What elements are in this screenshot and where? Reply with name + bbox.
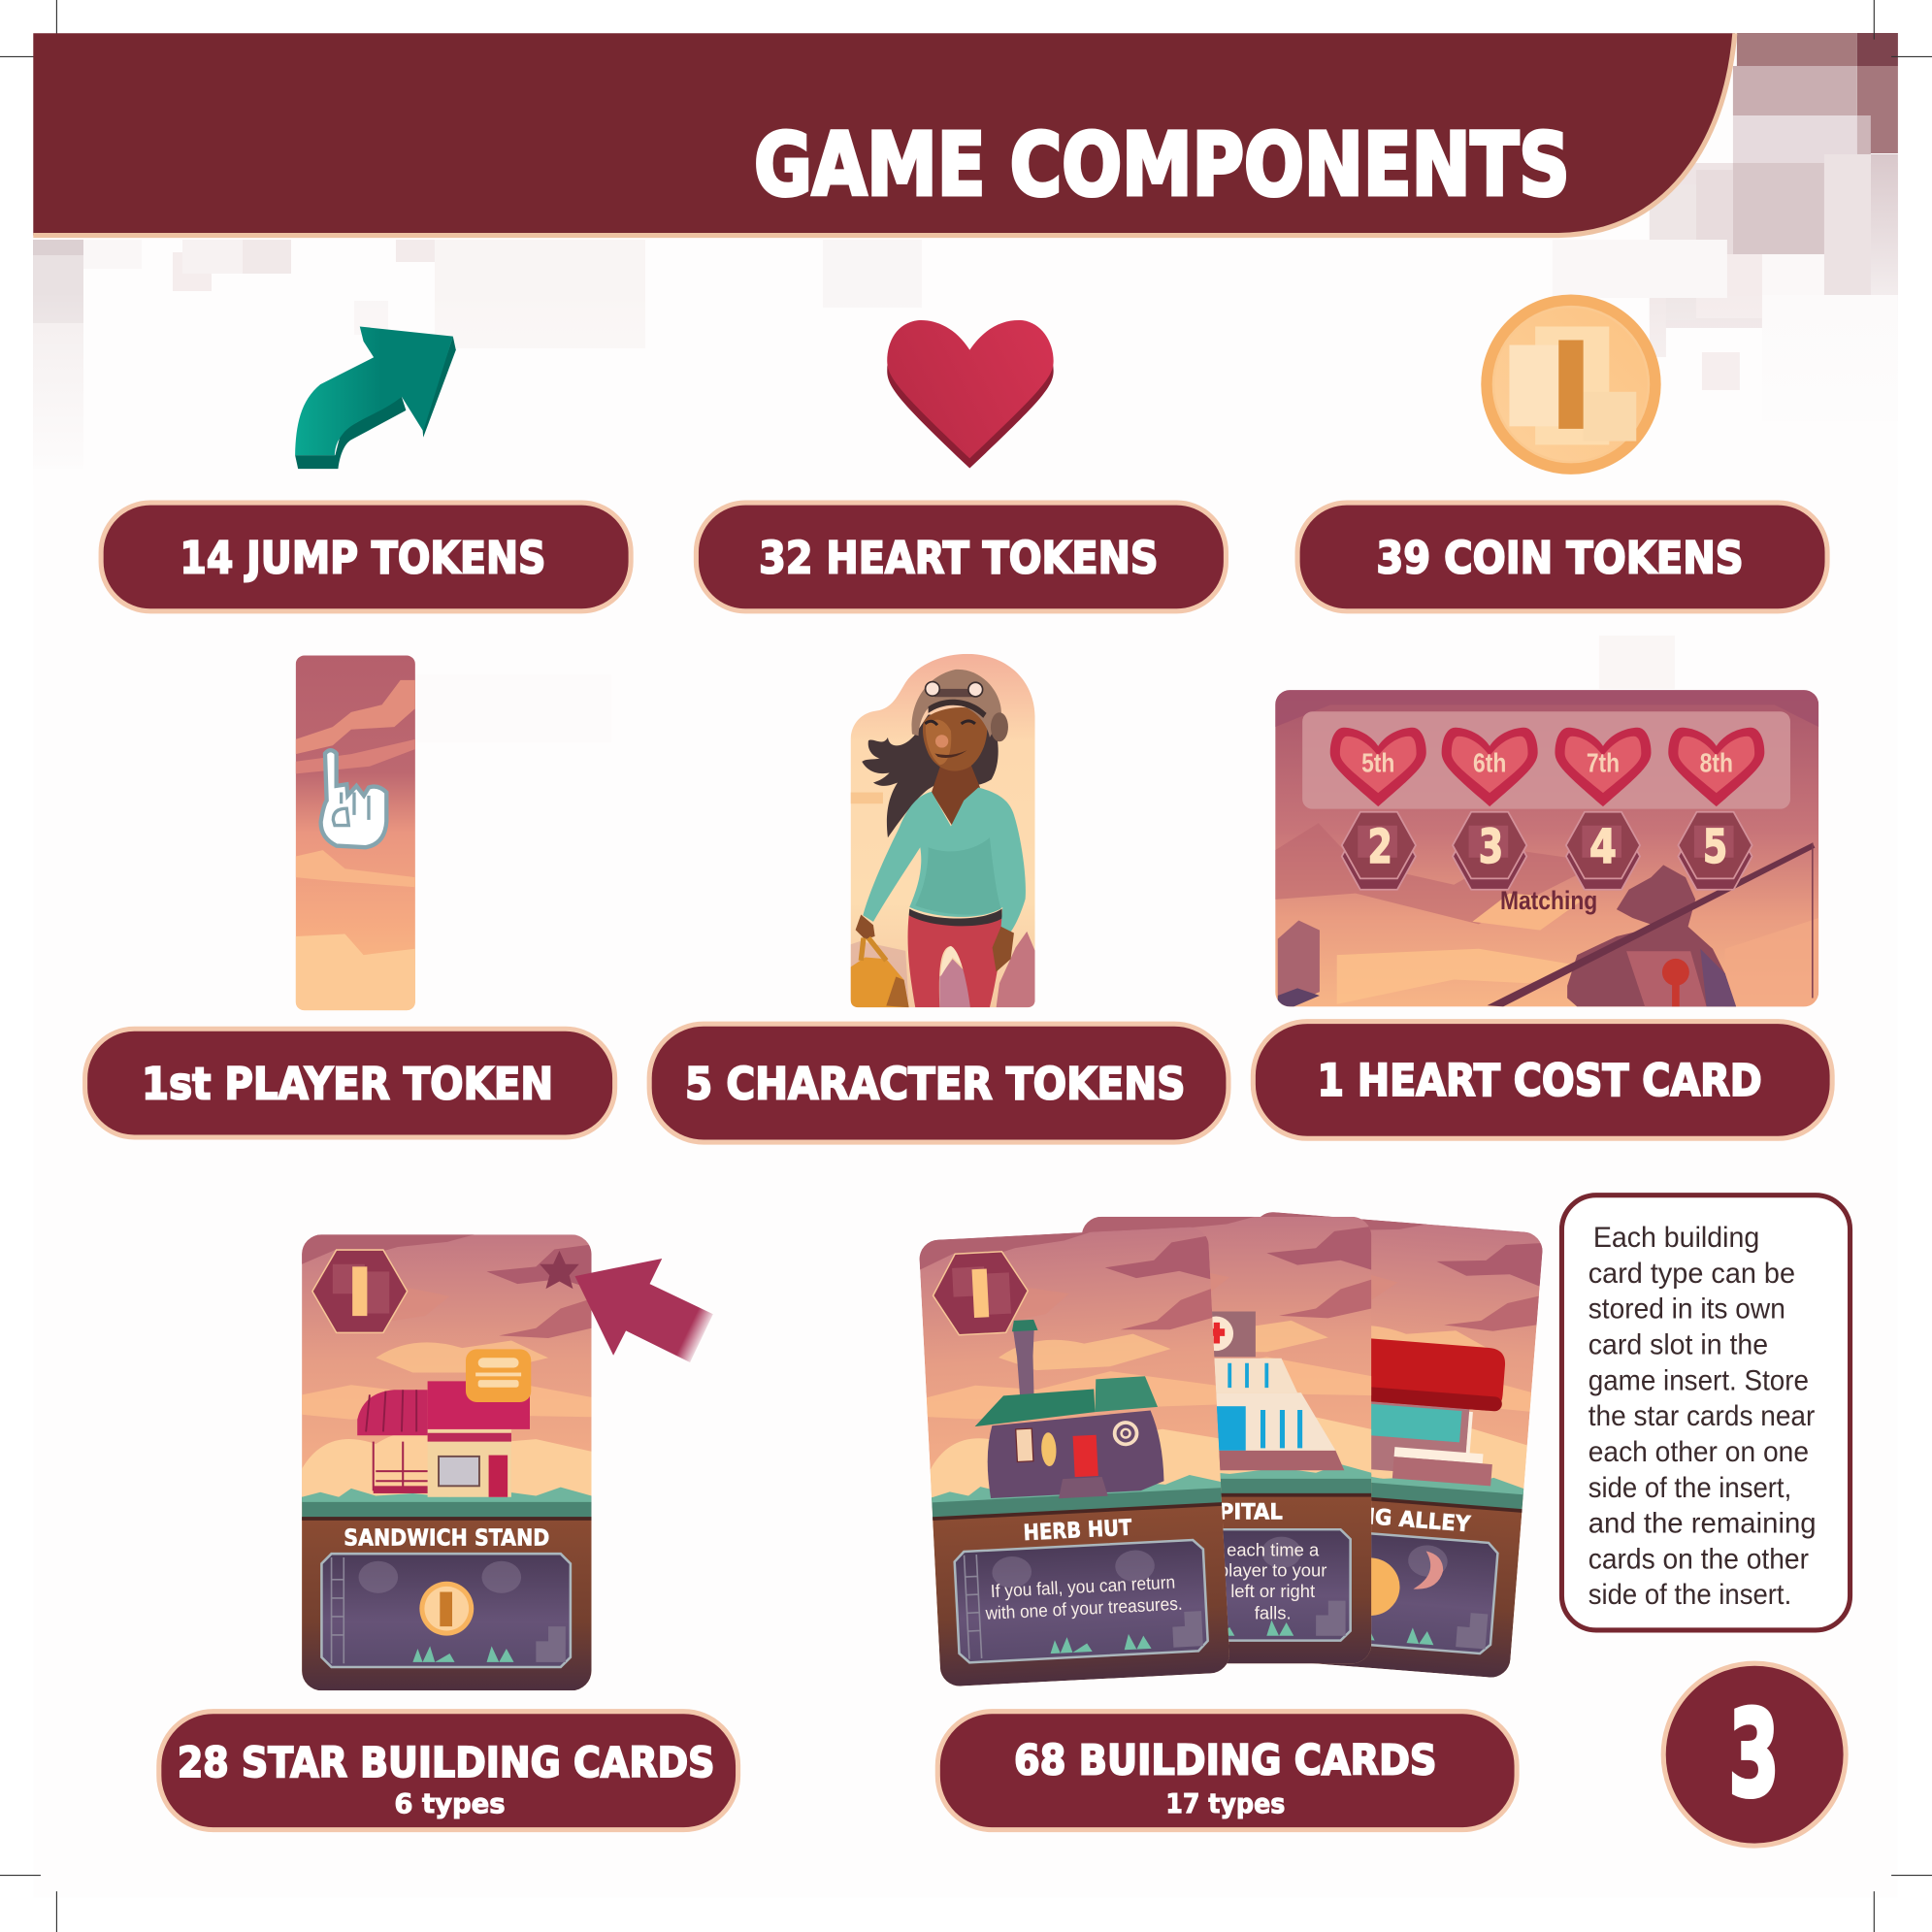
card: herb hut — [919, 1227, 1230, 1686]
hex: cost 2: 2 — [1367, 820, 1392, 874]
label: 1 heart cost card: 1 HEART COST CARD — [1317, 1055, 1762, 1106]
icon: jump arrow — [295, 326, 456, 469]
coin — [1338, 1555, 1402, 1618]
callout: storage note: Each building — [1593, 1223, 1759, 1254]
ability text: left or right — [1230, 1582, 1315, 1601]
ability text: player to your — [1219, 1561, 1326, 1581]
callout: storage note: and the remaining — [1588, 1509, 1817, 1540]
ability text: with one of your treasures. — [984, 1593, 1183, 1623]
label: 39 coin tokens: 39 COIN TOKENS — [1376, 532, 1744, 583]
building: hospital — [1198, 1311, 1344, 1470]
heart: 8th: 8th — [1700, 748, 1733, 778]
hands — [856, 915, 875, 939]
hex: cost 4: 4 — [1589, 820, 1617, 874]
title: GAME COMPONENTS — [754, 115, 1570, 215]
obelisk — [1278, 921, 1320, 1000]
hair — [862, 715, 999, 837]
hex: cost 4 — [1566, 812, 1640, 890]
label: 32 heart tokens: 32 HEART TOKENS — [759, 532, 1159, 583]
callout: storage note: each other on one — [1588, 1437, 1809, 1468]
star marker — [540, 1251, 579, 1289]
callout: storage note: side of the insert. — [1588, 1580, 1791, 1611]
callout: storage note: card type can be — [1588, 1259, 1795, 1290]
label: 28 star building cards — [159, 1712, 738, 1830]
shirt — [863, 788, 1026, 933]
label: 39 coin tokens — [1297, 503, 1827, 611]
card: hospital — [1082, 1217, 1371, 1663]
page number: 3 — [1728, 1686, 1780, 1823]
label: 1 heart cost card — [1253, 1022, 1832, 1138]
hex cost — [931, 1251, 1030, 1336]
icon: heart token — [887, 320, 1054, 469]
star building card: sandwich stand — [302, 1234, 591, 1690]
label: 68 building cards: 17 types — [1165, 1787, 1285, 1819]
card title: HOSPITAL — [1169, 1500, 1283, 1525]
coin — [419, 1582, 474, 1636]
bag — [851, 958, 909, 1007]
callout: storage note: the star cards near — [1588, 1401, 1816, 1432]
hex: cost 5 — [1678, 812, 1752, 890]
card title: BOWLING ALLEY — [1280, 1497, 1472, 1537]
heart: 6th — [1442, 728, 1538, 806]
building card fan — [919, 1211, 1544, 1686]
heart: 6th: 6th — [1473, 748, 1506, 778]
building: sandwich stand — [357, 1349, 531, 1497]
hex: cost 5: 5 — [1703, 820, 1727, 874]
header banner — [33, 33, 1735, 236]
callout: storage note: game insert. Store — [1588, 1365, 1809, 1396]
callout: storage note — [1561, 1195, 1850, 1630]
card title: HERB HUT — [1023, 1516, 1132, 1546]
heart: 7th — [1555, 728, 1651, 806]
arrow pointing at star — [574, 1259, 713, 1362]
crescent moon — [1413, 1551, 1445, 1591]
hex cost — [312, 1250, 408, 1332]
callout: storage note: cards on the other — [1588, 1544, 1809, 1575]
building: bowling alley — [1296, 1333, 1506, 1487]
callout: storage note: stored in its own — [1588, 1294, 1785, 1326]
card: bowling alley — [1220, 1211, 1544, 1679]
ability text: If you fall, you can return — [990, 1572, 1176, 1601]
callout: storage note: side of the insert, — [1588, 1473, 1791, 1504]
heart: 7th: 7th — [1587, 748, 1620, 778]
heart: 5th — [1330, 728, 1426, 806]
warrior — [1567, 865, 1736, 1006]
label: 68 building cards: 68 BUILDING CARDS — [1014, 1736, 1437, 1785]
label: 1st player token — [85, 1029, 615, 1137]
heart: 8th — [1668, 728, 1764, 806]
label: 28 star building cards: 6 types — [394, 1787, 506, 1819]
hex: cost 3: 3 — [1479, 820, 1503, 874]
character token — [851, 653, 1035, 1009]
label: 68 building cards — [937, 1712, 1517, 1830]
label: 14 jump tokens — [101, 503, 631, 611]
label: 32 heart tokens — [696, 503, 1226, 611]
label: 14 jump tokens: 14 JUMP TOKENS — [180, 532, 546, 583]
heart cost panel — [1302, 711, 1790, 809]
hex: cost 2 — [1342, 812, 1416, 890]
pants — [908, 915, 1002, 1007]
label: 5 character tokens — [649, 1024, 1228, 1142]
heart: 5th: 5th — [1361, 748, 1394, 778]
ability text: falls. — [1255, 1603, 1292, 1622]
first player token — [296, 656, 415, 1010]
label: 5 character tokens: 5 CHARACTER TOKENS — [685, 1059, 1186, 1110]
icon: coin token — [1481, 294, 1661, 475]
card title: SANDWICH STAND — [344, 1525, 549, 1551]
label: 1st player token: 1st PLAYER TOKEN — [142, 1059, 553, 1110]
label: 28 star building cards: 28 STAR BUILDING CARDS — [178, 1739, 714, 1787]
icon: pointing hand — [321, 750, 386, 847]
hex: cost 3 — [1453, 812, 1526, 890]
page number — [1663, 1663, 1846, 1846]
callout: storage note: card slot in the — [1588, 1329, 1768, 1360]
matching label: Matching — [1500, 886, 1597, 915]
face — [923, 707, 987, 771]
heart cost card — [1275, 690, 1818, 1006]
building: herb hut — [969, 1314, 1164, 1502]
headgear — [912, 670, 1001, 737]
ability text: each time a — [1227, 1541, 1320, 1560]
neck — [932, 764, 980, 827]
